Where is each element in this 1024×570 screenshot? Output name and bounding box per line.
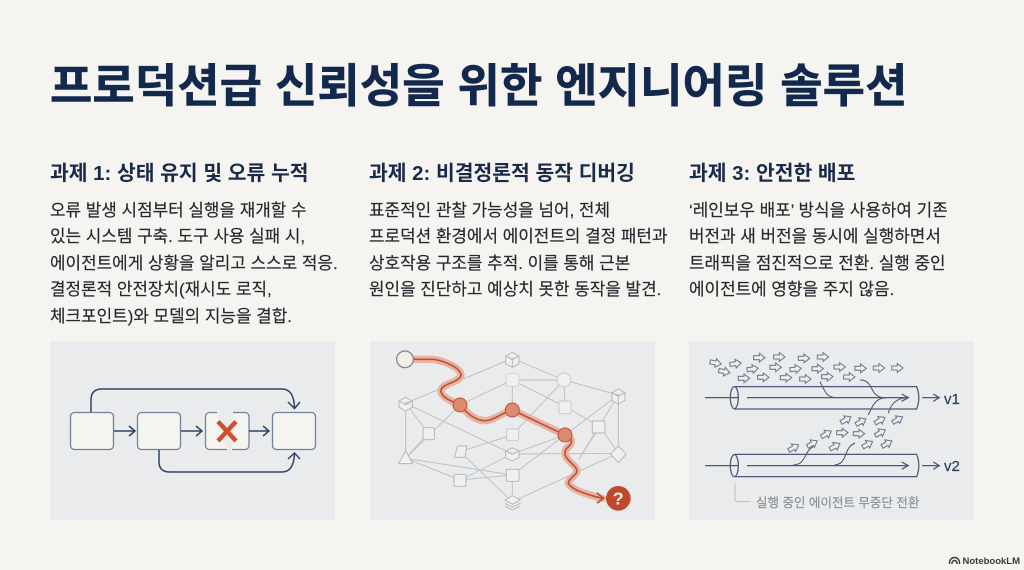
text: challenge 3 body: 버전과 새 버전을 동시에 실행하면서	[689, 227, 941, 246]
text: challenge 2 body: 표준적인 관찰 가능성을 넘어, 전체	[369, 200, 610, 220]
heading: challenge 3: 과제 3: 안전한 배포	[689, 163, 855, 185]
box 4	[272, 412, 316, 450]
highlighted path	[414, 359, 604, 503]
text: challenge 2 body	[369, 200, 668, 299]
callout label: 실행 중인 에이전트 무중단 전환	[756, 495, 920, 510]
graph nodes	[399, 352, 626, 510]
heading: challenge 1: 과제 1: 상태 유지 및 오류 누적	[50, 163, 308, 185]
callout bracket	[735, 483, 751, 502]
text: challenge 1 body: 결정론적 안전장치(재시도 로직,	[50, 280, 272, 299]
panel: retry flow diagram	[50, 341, 335, 520]
text: challenge 3 body: ‘레인보우 배포’ 방식을 사용하여 기존	[689, 200, 948, 220]
text: challenge 1 body: 체크포인트)와 모델의 지능을 결합.	[50, 307, 292, 326]
text: challenge 1 body	[50, 200, 338, 326]
label v1: v1	[944, 391, 960, 408]
text: challenge 1 body: 에이전트에게 상황을 알리고 스스로 적응.	[50, 254, 338, 273]
arrows between boxes	[91, 389, 300, 472]
box 2	[138, 412, 180, 450]
text: challenge 2 body: 원인을 진단하고 예상치 못한 동작을 발견.	[369, 280, 661, 299]
heading: challenge 2: 과제 2: 비결정론적 동작 디버깅	[369, 163, 635, 185]
text: challenge 3 body	[689, 200, 948, 299]
text: challenge 3 body: 에이전트에 영향을 주지 않음.	[689, 280, 894, 299]
title: 프로덕션급 신뢰성을 위한 엔지니어링 솔루션	[50, 60, 908, 112]
icon: question mark	[606, 486, 631, 511]
text: challenge 3 body: 트래픽을 점진적으로 전환. 실행 중인	[689, 254, 946, 273]
panel: rainbow deployment diagram	[689, 341, 974, 520]
waypoint nodes	[453, 398, 572, 442]
logo: NotebookLM: NotebookLM	[962, 556, 1020, 567]
icon: question mark: ?	[613, 489, 624, 509]
pipe v1	[705, 387, 939, 409]
traffic curves	[793, 380, 907, 465]
panel: agent decision graph	[370, 341, 655, 520]
pipe v2	[705, 454, 939, 477]
traffic arrows	[709, 353, 905, 454]
icon: red X	[218, 422, 236, 441]
text: challenge 1 body: 있는 시스템 구축. 도구 사용 실패 시,	[50, 227, 305, 246]
box 1	[70, 412, 114, 450]
box 3 failed	[206, 412, 249, 450]
start node	[397, 351, 413, 368]
text: challenge 2 body: 상호작용 구조를 추적. 이를 통해 근본	[369, 254, 630, 273]
text: challenge 1 body: 오류 발생 시점부터 실행을 재개할 수	[50, 200, 307, 220]
text: challenge 2 body: 프로덕션 환경에서 에이전트의 결정 패턴과	[369, 227, 667, 246]
graph edges	[406, 358, 618, 502]
label v2: v2	[944, 458, 960, 475]
